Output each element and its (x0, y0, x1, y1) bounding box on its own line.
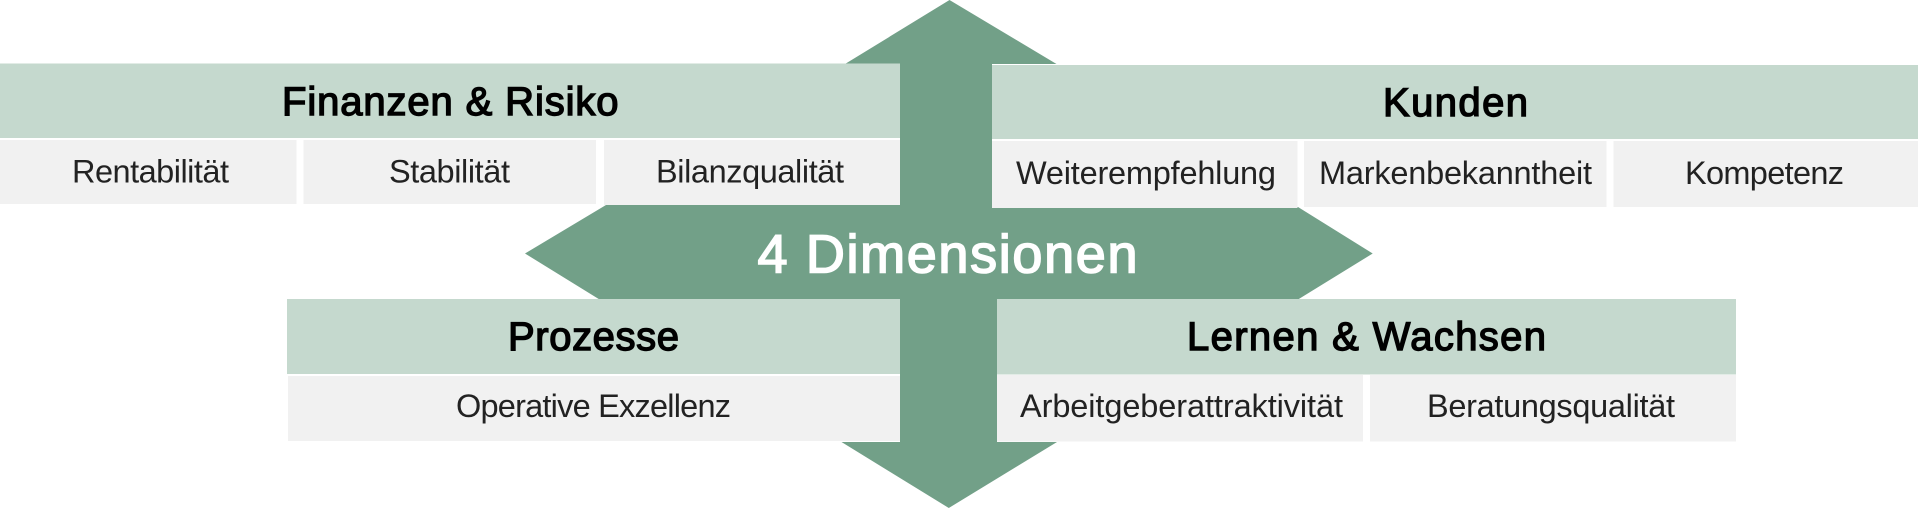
cell: Arbeitgeberattraktivität: Arbeitgeberattraktivität (1020, 388, 1343, 424)
cell: Operative Exzellenz (288, 376, 900, 441)
header bar: Kunden: Kunden (1383, 81, 1528, 125)
header bar: Prozesse: Prozesse (508, 315, 679, 359)
cell: Weiterempfehlung (992, 141, 1298, 208)
panel: Finanzen & Risiko (0, 64, 900, 205)
header bar: Lernen & Wachsen (997, 299, 1736, 374)
center title: 4 Dimensionen (758, 224, 1138, 284)
header bar: Lernen & Wachsen: Lernen & Wachsen (1187, 315, 1546, 359)
panel: Lernen & Wachsen (997, 299, 1736, 442)
cell: Rentabilität (0, 140, 296, 204)
header bar: Kunden (992, 65, 1918, 139)
cell: Stabilität (304, 140, 596, 204)
cell: Markenbekanntheit: Markenbekanntheit (1319, 155, 1592, 191)
header bar: Prozesse (287, 299, 900, 374)
cell: Kompetenz: Kompetenz (1685, 155, 1844, 191)
panel: Kunden (992, 65, 1918, 208)
cell: Markenbekanntheit (1304, 141, 1606, 207)
cell: Stabilität: Stabilität (389, 154, 510, 190)
four-way arrow (525, 0, 1373, 508)
cell: Bilanzqualität: Bilanzqualität (656, 154, 844, 190)
cell: Operative Exzellenz: Operative Exzellenz (456, 388, 731, 424)
header bar: Finanzen & Risiko (0, 64, 900, 138)
cell: Beratungsqualität: Beratungsqualität (1427, 388, 1675, 424)
cell: Arbeitgeberattraktivität (997, 375, 1363, 442)
cell: Bilanzqualität (604, 140, 900, 205)
header bar: Finanzen & Risiko: Finanzen & Risiko (282, 80, 618, 124)
cell: Beratungsqualität (1370, 375, 1736, 442)
cell: Rentabilität: Rentabilität (72, 154, 229, 190)
panel: Prozesse (287, 299, 900, 441)
cell: Weiterempfehlung: Weiterempfehlung (1016, 155, 1276, 191)
cell: Kompetenz (1614, 141, 1918, 207)
